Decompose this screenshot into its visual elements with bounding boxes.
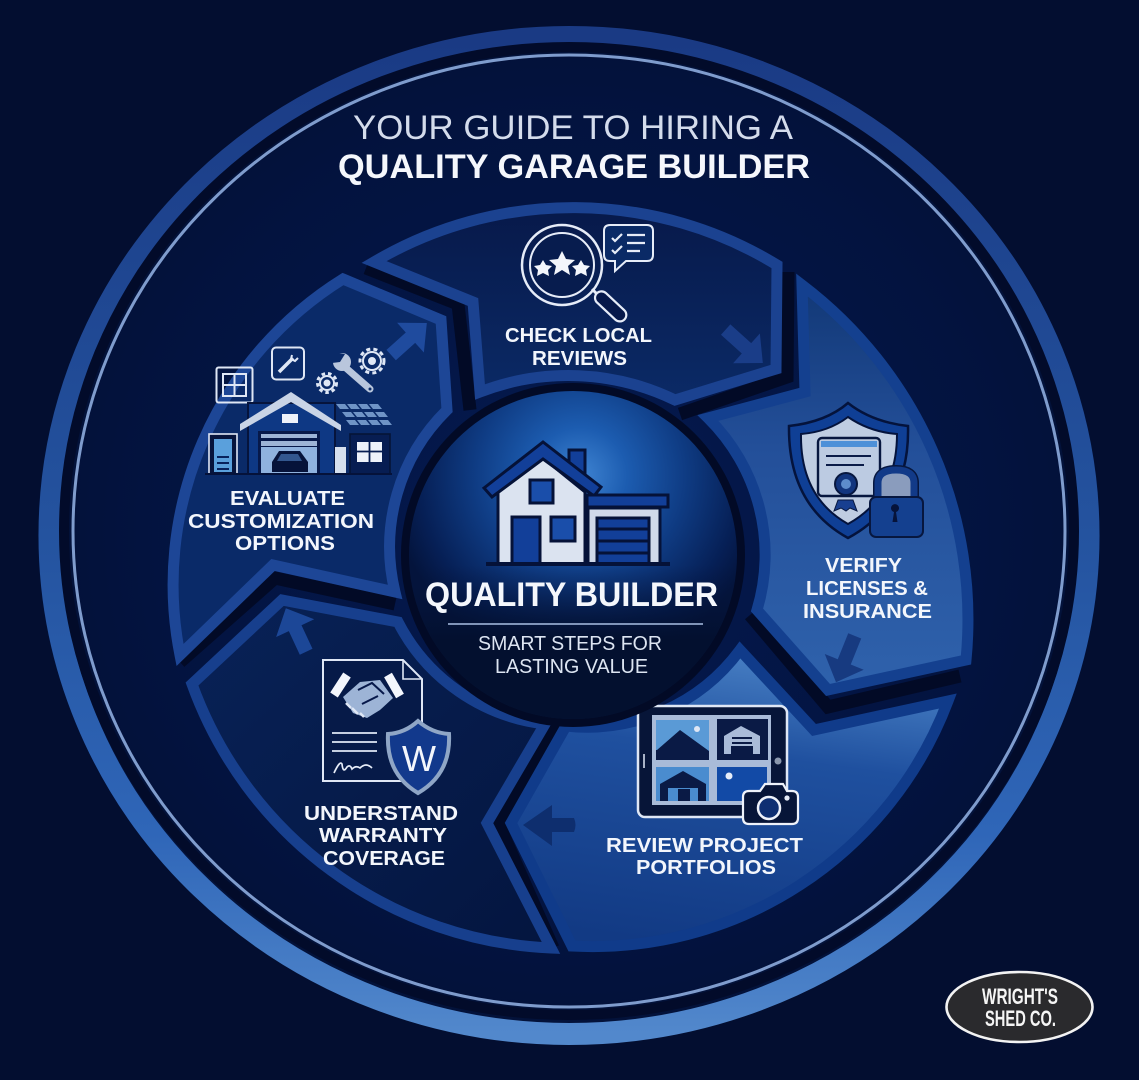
- hub divider: [448, 623, 703, 625]
- label: understand warranty coverage: [304, 803, 458, 870]
- label: verify licenses and insurance: INSURANCE: [803, 601, 932, 623]
- icon: padlock: [870, 470, 923, 537]
- panel: understand warranty coverage: [192, 599, 551, 948]
- title: [338, 109, 810, 186]
- icon: tablet gallery: [638, 706, 787, 817]
- arrow: evaluate to top: [378, 308, 440, 370]
- icon: house with garage: [484, 442, 670, 564]
- label: understand warranty coverage: WARRANTY: [319, 825, 448, 847]
- panel: check local reviews: [374, 208, 777, 400]
- hub subtitle: SMART STEPS FOR: [478, 633, 662, 655]
- label: review project portfolios: PORTFOLIOS: [636, 857, 776, 879]
- label: understand warranty coverage: UNDERSTAND: [304, 803, 458, 825]
- icon: solar panels: [336, 404, 392, 425]
- panel: review project portfolios: [511, 650, 948, 947]
- label: check local reviews: [505, 325, 652, 370]
- hub title: QUALITY BUILDER: [425, 576, 718, 614]
- hub subtitle: LASTING VALUE: [495, 656, 648, 678]
- panel: center hub: [401, 383, 745, 727]
- icon: camera: [743, 784, 798, 824]
- label: understand warranty coverage: COVERAGE: [323, 848, 445, 870]
- label: evaluate customization options: OPTIONS: [235, 533, 335, 555]
- logo badge: WRIGHT'S: [982, 984, 1058, 1009]
- label: evaluate customization options: EVALUATE: [230, 488, 345, 510]
- icon: wrench: [332, 352, 372, 390]
- title: YOUR GUIDE TO HIRING A: [353, 109, 793, 147]
- icon: checklist bubble: [604, 225, 653, 271]
- logo badge: SHED CO.: [985, 1006, 1056, 1031]
- panel: verify licenses and insurance: [708, 285, 968, 690]
- icon: shield with certificate: [789, 403, 908, 538]
- label: evaluate customization options: [188, 488, 374, 555]
- label: verify licenses and insurance: LICENSES &: [806, 578, 928, 600]
- arrow: bottom to warranty: [523, 805, 576, 846]
- arrow: warranty to evaluate: [267, 599, 325, 661]
- label: check local reviews: REVIEWS: [532, 348, 627, 370]
- label: evaluate customization options: CUSTOMIZATION: [188, 511, 374, 533]
- label: verify licenses and insurance: VERIFY: [825, 555, 903, 577]
- arrow: top to right: [712, 315, 776, 378]
- hub subtitle: [478, 633, 662, 678]
- label: check local reviews: CHECK LOCAL: [505, 325, 652, 347]
- arrow: right to bottom: [817, 628, 874, 690]
- icon: garage with car: [205, 392, 392, 474]
- icon: window, tool and gears: [216, 348, 384, 402]
- label: review project portfolios: [606, 835, 803, 879]
- gaps between segments: [180, 268, 960, 948]
- icon: warranty shield: [388, 721, 449, 793]
- label: review project portfolios: REVIEW PROJECT: [606, 835, 803, 857]
- icon: warranty shield: W: [402, 738, 436, 779]
- icon: contract with handshake: [323, 660, 422, 781]
- title: QUALITY GARAGE BUILDER: [338, 148, 810, 186]
- label: verify licenses and insurance: [803, 555, 932, 623]
- panel: evaluate customization options: [173, 279, 447, 655]
- icon: magnifier with stars: [522, 225, 629, 324]
- logo badge: [946, 972, 1092, 1042]
